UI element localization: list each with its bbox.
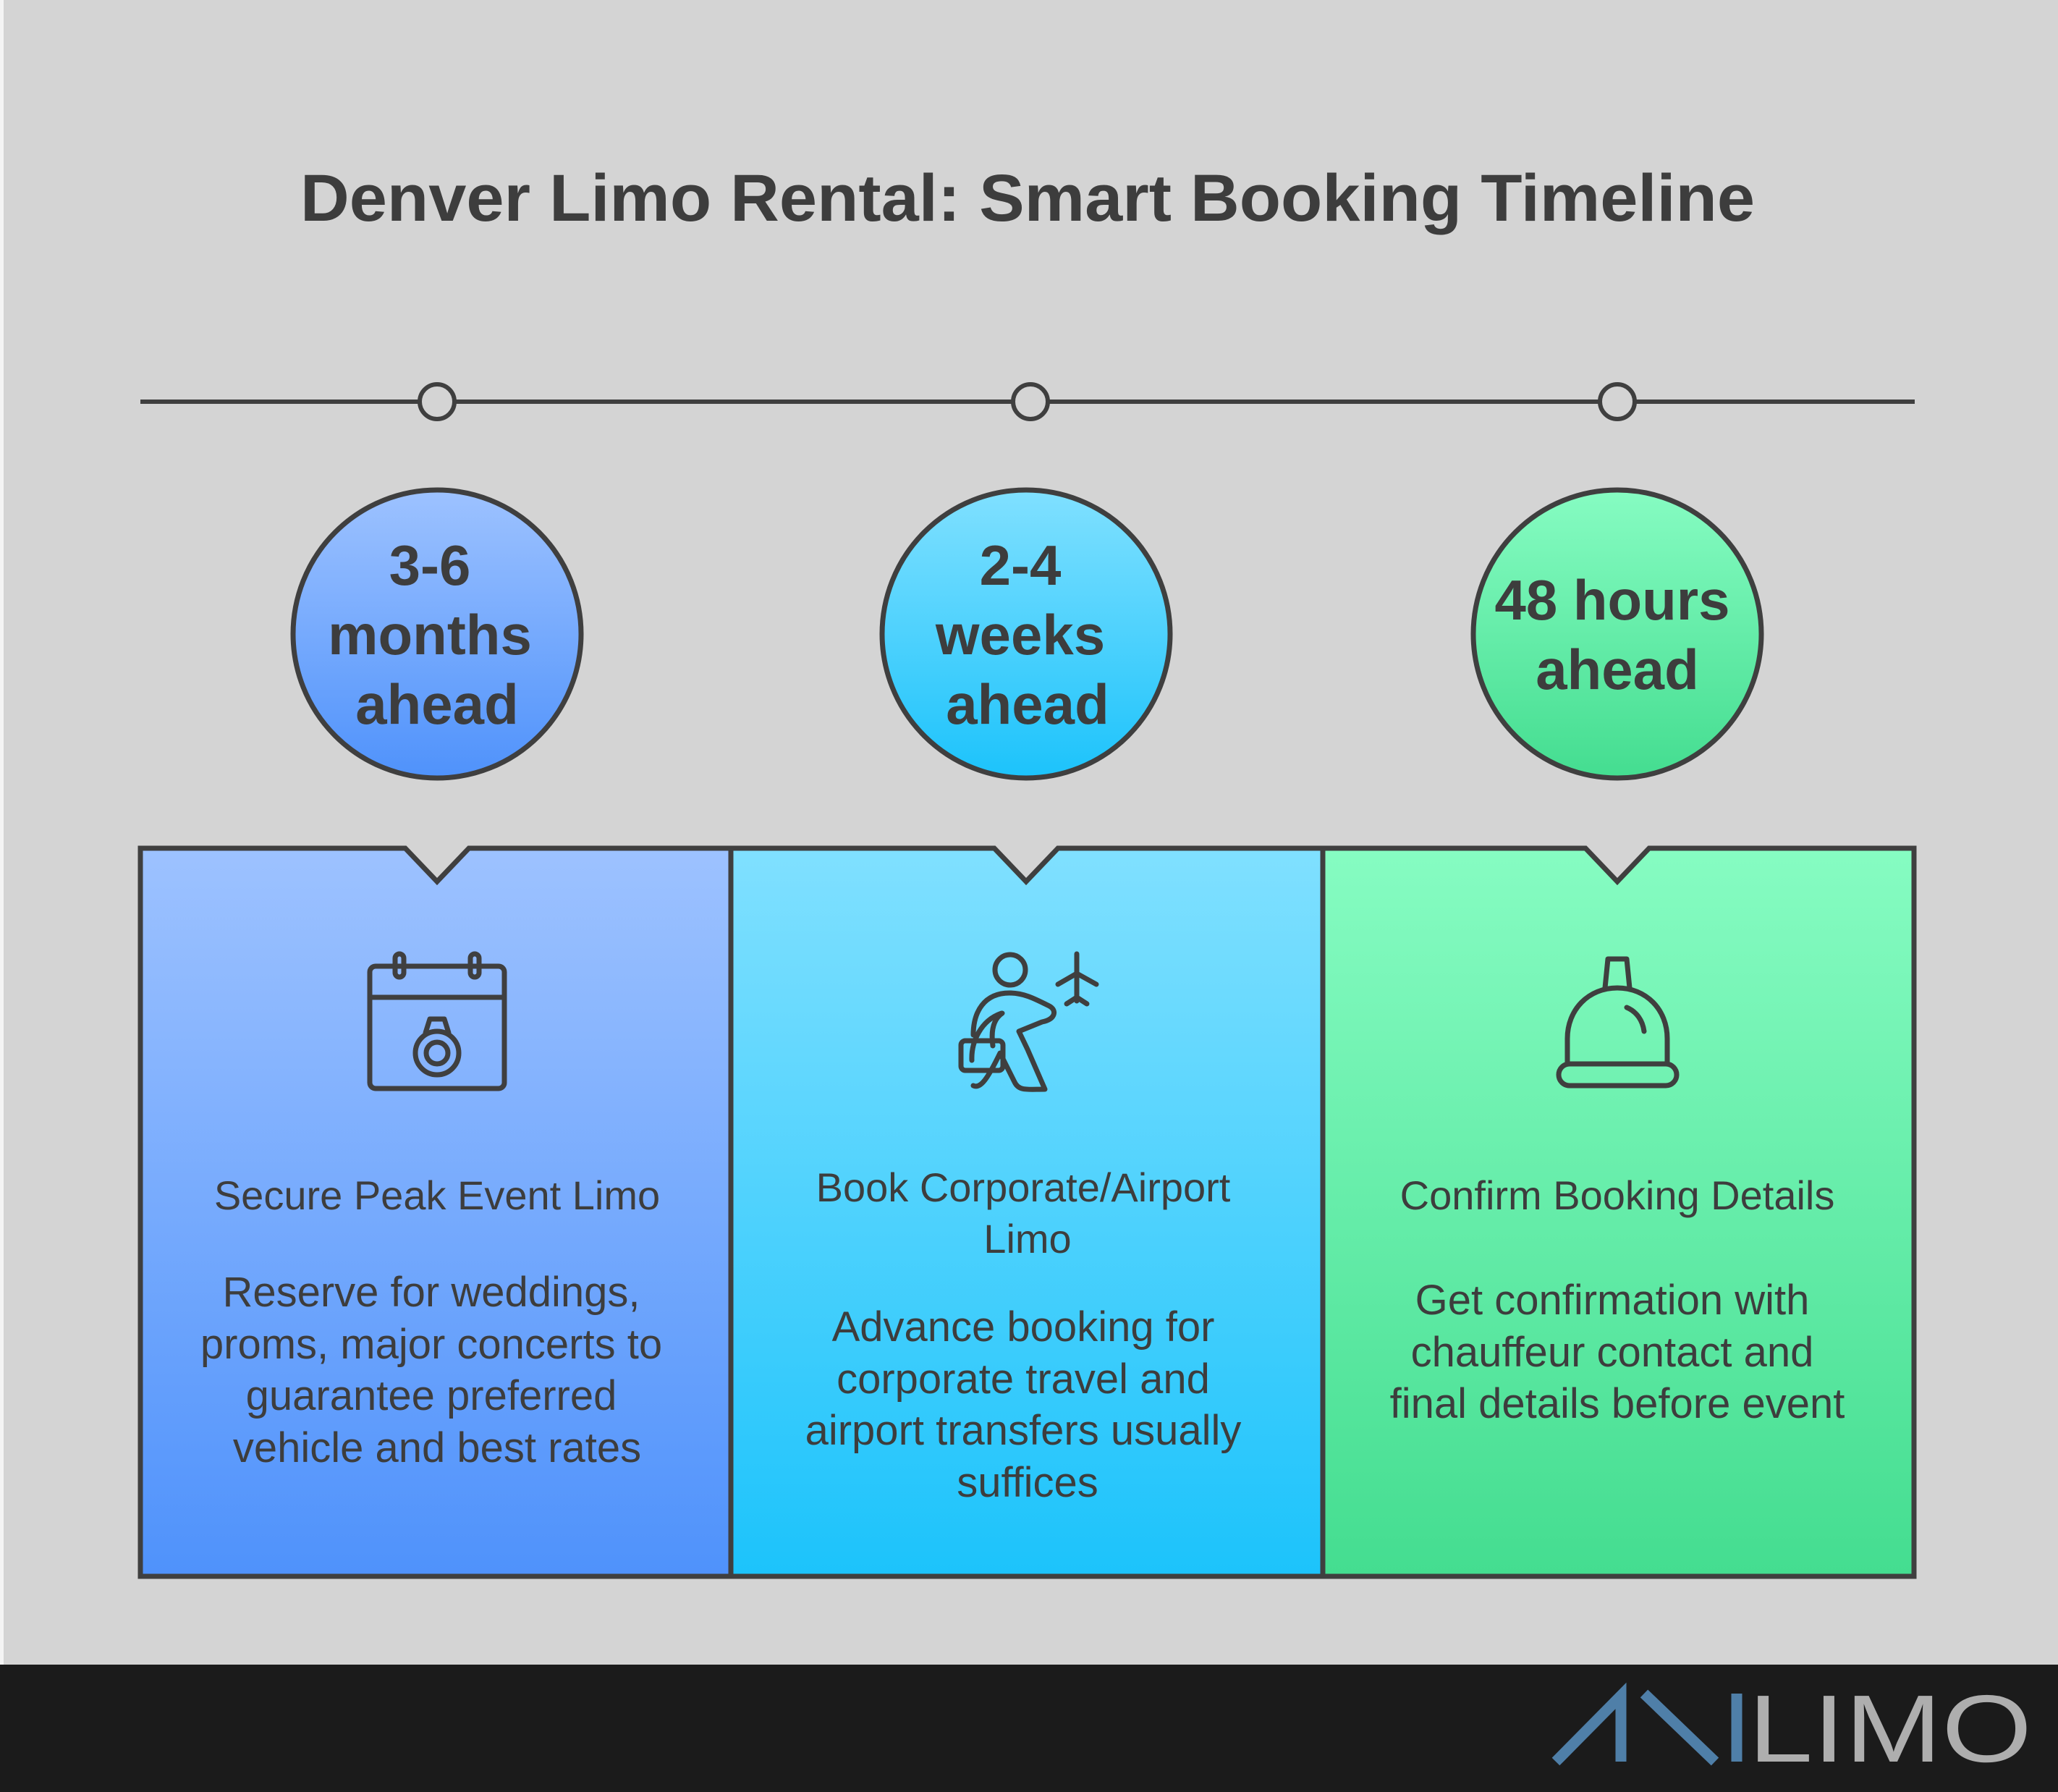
text: panel 1: vehicle and best rates [233, 1424, 641, 1471]
circle: 48 hours ahead: ahead [1536, 638, 1699, 701]
text: panel 3: chauffeur contact and [1411, 1329, 1813, 1376]
circle: 3-6 months ahead [293, 490, 581, 778]
text: panel 3 [1390, 1172, 1845, 1427]
circle: 48 hours ahead: 48 hours [1494, 568, 1730, 632]
footer [0, 1665, 2058, 1792]
text: panel 2: suffices [957, 1459, 1098, 1506]
icon: calendar with ring [370, 954, 504, 1089]
panel: secure peak event limo [140, 848, 731, 1576]
text: panel 2: Advance booking for [832, 1303, 1214, 1351]
icon: traveler with plane [961, 954, 1096, 1089]
circle: 48 hours ahead [1473, 490, 1761, 778]
circle: 2-4 weeks ahead: ahead [946, 672, 1109, 736]
text: panel 1 [200, 1172, 662, 1471]
panel: confirm booking details [1323, 848, 1914, 1576]
panel: book corporate/airport limo [731, 848, 1323, 1576]
text: panel 2: airport transfers usually [805, 1407, 1241, 1454]
text: panel 2: Limo [983, 1216, 1072, 1261]
circle: 3-6 months ahead: months [328, 603, 532, 667]
text: panel 1: proms, major concerts to [200, 1321, 662, 1368]
circle: 2-4 weeks ahead [882, 490, 1170, 778]
logo: LIMO [1748, 1675, 2032, 1782]
circle: 2-4 weeks ahead: 2-4 [980, 533, 1061, 597]
timeline [140, 384, 1915, 419]
icon: service bell [1559, 959, 1677, 1086]
circle: 3-6 months ahead: ahead [355, 672, 519, 736]
text: panel 2: corporate travel and [837, 1356, 1210, 1403]
text: panel 2 [805, 1165, 1241, 1506]
title: Denver Limo Rental: Smart Booking Timeline [300, 161, 1755, 235]
text: panel 1: guarantee preferred [246, 1372, 617, 1419]
text: panel 3: Confirm Booking Details [1400, 1172, 1834, 1218]
circle: 3-6 months ahead: 3-6 [389, 533, 470, 597]
text: panel 3: final details before event [1390, 1380, 1845, 1427]
text: panel 1: Reserve for weddings, [222, 1269, 640, 1316]
logo [1556, 1675, 2032, 1782]
text: panel 2: Book Corporate/Airport [816, 1165, 1231, 1210]
circle: 2-4 weeks ahead: weeks [935, 603, 1105, 667]
text: panel 1: Secure Peak Event Limo [214, 1172, 660, 1218]
text: panel 3: Get confirmation with [1415, 1277, 1809, 1324]
